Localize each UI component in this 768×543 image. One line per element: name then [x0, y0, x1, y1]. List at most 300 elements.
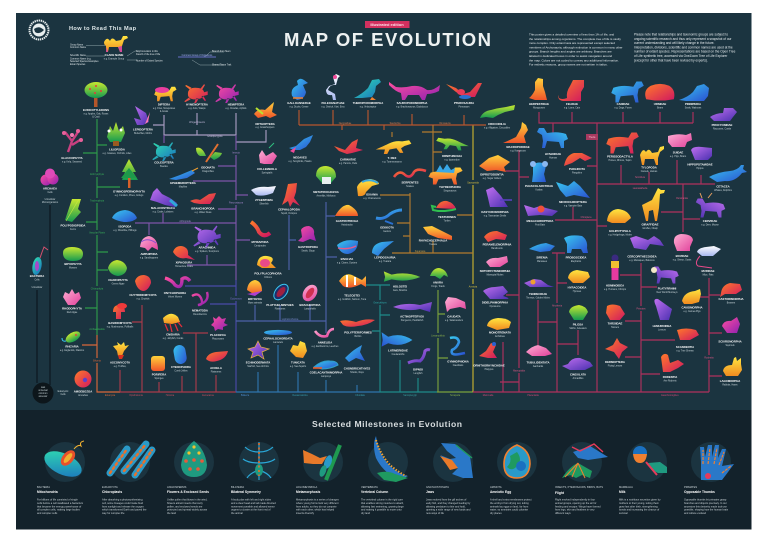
feathered theropod: [353, 79, 383, 108]
branch labels: Neognathae: [339, 122, 352, 125]
fly: DIPTERA: [158, 102, 170, 106]
grasshopper: [254, 102, 277, 129]
koala: PHASCOLARCTIDAE: [525, 184, 553, 188]
spider: [193, 225, 221, 253]
kangaroo: MACROPODIDAE: [506, 145, 530, 149]
milestone: flight: animal groups, opening up the air for: [555, 501, 597, 505]
milestone: milk: mothers to their young, letting them: [619, 501, 659, 505]
orange shell: GASTROTRICHA: [336, 219, 358, 223]
archaea: Microorganisms: [42, 201, 59, 204]
branch labels: Vascular Plants: [89, 232, 106, 234]
euglena: [60, 329, 85, 352]
nematode worm pair: ONYCHOPHORA: [164, 291, 186, 295]
tarsier: [606, 304, 625, 329]
armadillo: CINGULATA: [570, 372, 586, 376]
sauropod: SAUROPODOMORPHA: [397, 101, 427, 105]
whale: Whales, Dolphins: [714, 190, 733, 192]
hummingbird: [289, 135, 313, 163]
hedgehog: e.g. Hedgehogs, Moles: [608, 234, 633, 236]
milestone: amniotic egg: AMNIOTA: [490, 485, 502, 489]
horseshoe crab: Horseshoe Crabs: [175, 265, 194, 268]
tree branches: protists base: [82, 335, 120, 392]
milestone: chloroplasts: [102, 442, 152, 515]
legend: how to read this map: CLADE NAME: [105, 53, 123, 57]
opossum: Opossums: [490, 306, 501, 308]
legend: how to read this map: How to Read This Map: [69, 26, 137, 32]
giraffe: Giraffes, Okapi: [642, 227, 658, 230]
fruit bat: [524, 205, 558, 226]
bacteria: [30, 247, 48, 289]
clownfish: TELEOSTEI: [344, 294, 360, 298]
blue clam: [337, 240, 358, 264]
branch labels: Afrotheria: [552, 304, 563, 308]
legend: how to read this map: Scientific Name: [70, 54, 87, 57]
frog: ANURA: [433, 280, 443, 284]
sponge: [151, 356, 166, 380]
nematode worm pair: Velvet Worms: [168, 296, 183, 298]
header: logo: [30, 20, 48, 40]
pink frilly alga: [62, 289, 82, 314]
brachiopod: [299, 282, 321, 310]
lungfish eel: Lungfish: [414, 373, 423, 375]
human: [604, 254, 627, 291]
deer: CERVIDAE: [703, 219, 717, 223]
milestone: mitochondria: BACTERIA: [37, 485, 50, 489]
seal: PINNIPEDIA: [685, 102, 701, 106]
giraffe: [641, 188, 665, 230]
pterosaur: PTEROSAURIA: [454, 101, 474, 105]
horse: PERISSODACTYLA: [607, 154, 633, 158]
camel: Camels, Llamas: [641, 171, 658, 173]
intro text column 2: number of extant species. Representations are based on the Open Tree: [634, 50, 736, 54]
jellyfish: [163, 314, 184, 340]
fly: [153, 87, 177, 113]
milestone: amniotic egg: [490, 442, 537, 515]
pig: [668, 133, 692, 158]
elephant: [564, 235, 588, 263]
milestone: jaws: GNATHOSTOMATA: [426, 485, 449, 489]
turtle: TESTUDINES: [438, 215, 456, 219]
crocodile: e.g. Alligators, Crocodiles: [484, 126, 511, 130]
milestone: metamorphosis: Metamorphosis: [296, 490, 321, 494]
milestone: bilateral symmetry: organs to cluster at the front end of: [231, 508, 271, 512]
coelacanth: LATIMERIIDAE: [388, 348, 408, 352]
amphipod: [140, 236, 159, 260]
branch labels: Ruminantia: [676, 197, 689, 200]
sea squirt: [290, 341, 307, 368]
squid: CEPHALOPODA: [278, 208, 300, 212]
pangolin: Pangolins: [572, 172, 583, 174]
tree branches: plants: [83, 119, 120, 335]
sheep: e.g. Sheep, Goats: [673, 258, 692, 262]
armadillo yellow: Hyraxes: [573, 290, 582, 293]
intro text column 2: of Life synthetic tree, accessed via OneZoom Tree of Life Explorer: [634, 54, 728, 58]
amoeba cell: AMOEBOZOA: [74, 390, 92, 394]
tamarin: [651, 266, 679, 294]
milestone: jaws: allowing predators to bite and hold,: [426, 504, 466, 508]
bear: Bears: [657, 106, 664, 110]
ostrich: PALEOGNATHAE: [321, 101, 345, 105]
aardvark: Aardvarks: [533, 365, 544, 368]
bat: MICROCHIROPTERA: [559, 200, 587, 204]
whale: CETACEA: [716, 184, 730, 188]
archaea: ARCHAEA: [43, 186, 57, 190]
wolf: CANIDAE: [617, 102, 630, 106]
pink worm: Roundworms: [193, 313, 208, 316]
duck bird: e.g. Ducks, Geese: [290, 106, 309, 108]
milestone: vertebral column: that enables strong muscles to attach,: [361, 501, 404, 505]
milestone: amniotic egg: water, so amniotes could colonise: [490, 508, 529, 512]
earthworm: e.g. Earthworms, Leeches: [312, 345, 339, 348]
milestone: flight: from legs, skin and feathers in very: [555, 508, 595, 512]
snake: Snakes: [406, 186, 415, 188]
coelacanth: [382, 332, 412, 356]
firefly shrimp: EPHEMEROPTERA: [170, 181, 196, 185]
giraffe: GIRAFFIDAE: [641, 222, 659, 226]
beaver: CASTORIMORPHA: [719, 297, 743, 301]
milestone: vertebral column: VERTEBRATA: [361, 485, 378, 489]
fern: POLYPODIOPSIDA: [61, 224, 85, 228]
branch labels: Eumetazoa: [202, 394, 215, 397]
octopus: GASTROPODA: [298, 245, 318, 249]
monkey: [627, 236, 664, 262]
moss: [63, 247, 83, 270]
butterfly: Butterflies, Moths: [134, 132, 153, 135]
milestone: mitochondria: [37, 441, 86, 515]
milestone: amniotic egg: A shell and extra membranes protect: [490, 498, 532, 502]
comb jelly: [171, 344, 191, 372]
flowering tree: EUDICOTYLEDONS: [83, 108, 109, 112]
fruit bat: MEGACHIROPTERA: [527, 219, 553, 223]
legend: how to read this map: Extant Species: [70, 63, 86, 66]
blue lion: [537, 128, 568, 160]
treeshrew: SCANDENTIA: [676, 345, 694, 349]
intro text column 2: [634, 32, 736, 62]
sauropod: [389, 82, 440, 108]
iguana: [372, 241, 396, 263]
monkey: e.g. Macaques, Baboons: [629, 260, 656, 262]
nudibranch: Moss animals: [248, 302, 263, 304]
moss: BRYOPHYTA: [64, 262, 82, 266]
orange shell: [335, 205, 358, 226]
tree branches: reptiles: [380, 125, 473, 253]
branch labels: Chordata: [355, 394, 365, 397]
blue clam: BIVALVIA: [341, 257, 353, 261]
stegosaurus: THYREOPHORA: [439, 185, 461, 189]
tag: [365, 21, 410, 28]
intro text column 1: groups. Branch lengths and angles are arbitrary. Branches are: [529, 50, 612, 54]
branch labels: Placentalia: [527, 394, 539, 397]
lilies: e.g. Grasses, Orchids, Lilies: [103, 152, 132, 155]
intro text column 1: For esthetic reasons, group names are not written in italics.: [529, 63, 608, 67]
scarab: [215, 84, 247, 110]
gar: [384, 271, 420, 292]
pterosaur: Pterosaurs: [458, 106, 470, 108]
sea squirt: TUNICATA: [291, 360, 305, 364]
ant: [184, 84, 208, 110]
milestone: milk: bonds and increasing the chance of: [619, 508, 660, 512]
whale: [709, 165, 747, 192]
brachiopod: BRACHIOPODA: [299, 303, 321, 307]
branch labels: Opisthokonta: [129, 394, 143, 397]
blue lion: Hyenas: [549, 158, 558, 160]
hagfish shark: CHONDRICHTHYES: [344, 366, 370, 370]
swordfish: [393, 302, 432, 322]
rabbit: [720, 357, 742, 386]
placozoa: Placozoans: [212, 338, 225, 340]
sponge: PORIFERA: [152, 372, 166, 376]
milestone: mitochondria: and complex cells: [37, 511, 58, 515]
milestone: opposable thumbs: PRIMATES: [684, 485, 697, 489]
red algae bush: [61, 129, 83, 164]
koala: [525, 161, 553, 192]
last universal common ancestor: common: [39, 393, 48, 395]
arachnid: e.g. Water Fleas: [195, 211, 212, 214]
milestone: chloroplasts: EUKARYOTA: [102, 485, 118, 489]
spider: e.g. Spiders, Scorpions: [195, 250, 220, 253]
legend: how to read this map: Common Group of Organisms: [182, 54, 213, 57]
felidae cat: [558, 80, 584, 110]
scarab: e.g. Cicadas, Aphids: [226, 107, 247, 110]
milestone: amniotic egg: animals lay eggs on land, far from: [490, 504, 528, 508]
branch labels: Sauropsida: [467, 182, 480, 184]
branch labels: Mammalia: [483, 395, 494, 397]
legend: how to read this map: Selected Species Examples: [70, 60, 99, 63]
crocodile: CROCODILIA: [488, 122, 506, 126]
archaea: Cells: [47, 192, 53, 194]
purple winged bird: e.g. Parrots, Owls: [339, 162, 358, 165]
bandicoot: Bandicoots: [491, 247, 504, 250]
bandicoot: PERAMELEMORPHIA: [483, 242, 511, 246]
legend: how to read this map: e.g. Example Group: [104, 58, 125, 60]
echidna: Echidnas: [495, 336, 506, 338]
octopus: Snails, Slugs: [301, 250, 315, 252]
ostrich: [321, 74, 345, 108]
intro text column 1: more complex. Only extant taxa are represented except selected: [529, 41, 615, 45]
meerkat: [529, 78, 549, 110]
milestone: chloroplasts: cell, some lineages could make food: [102, 501, 144, 505]
tree branches: amphibians: [437, 290, 473, 392]
hagfish shark: Sharks, Rays: [350, 371, 365, 374]
branch labels: Amniota: [469, 286, 478, 288]
opossum: [482, 286, 508, 308]
intro text column 2: current understanding and will likely change in the future.: [634, 41, 715, 45]
intro text column 2: Please note that relationships and taxonomic groups are subject to: [634, 32, 728, 36]
beetle: COLEOPTERA: [154, 160, 174, 164]
pink worm: [192, 292, 208, 316]
branch labels: Ecdysozoa: [230, 298, 242, 300]
milestone: jaws: opening a wide range of new foods and: [426, 508, 471, 512]
milestone: flight: feeding and escape. Wings have formed: [555, 504, 601, 508]
branch labels: Theria: [589, 136, 596, 139]
brachiopod: Lampshells: [304, 308, 317, 310]
frog: [430, 268, 448, 288]
peacock worm: [313, 166, 339, 198]
milestone: vertebral column: Vertebral Column: [361, 490, 388, 494]
pika: RODENTIA: [663, 375, 677, 379]
intro text column 1: [529, 32, 623, 67]
mantis: [257, 143, 277, 174]
meerkat: Mongooses: [533, 108, 546, 110]
pika: Ave Rodents: [663, 380, 677, 382]
milestone: opposable thumbs: ancestors this dexterity made tool use: [684, 504, 727, 508]
red fungus: e.g. Chytrids: [137, 298, 150, 300]
milestone: opposable thumbs: possible, shaping how the human brain: [684, 508, 729, 512]
tree branches: deuterostomes: [236, 345, 380, 392]
caecilian: GYMNOPHIONA: [447, 360, 469, 364]
deer: [696, 193, 725, 226]
milestone: bilateral symmetry: the animal: [231, 511, 243, 515]
branch labels: Lissamphibia: [431, 336, 445, 338]
beaver: Beavers: [727, 302, 736, 304]
legend: how to read this map: Number of Extant Species: [136, 60, 164, 62]
bear: URSIDAE: [654, 102, 666, 106]
iguana: e.g. Tuatara: [379, 260, 392, 263]
orange shell: Hairybacks: [341, 224, 354, 226]
coral fungus: e.g. Truffles,: [114, 365, 127, 368]
treeshrew: e.g. Tree Shrews: [676, 350, 695, 352]
colugo: DERMOPTERA: [605, 360, 625, 364]
branch labels: Deuterostomia: [293, 394, 308, 397]
axolotl: CAUDATA: [447, 314, 461, 318]
capybara: [681, 289, 703, 313]
koala: Koalas: [535, 190, 543, 192]
human: e.g. Humans, Chimps: [604, 289, 627, 291]
branch labels: Rodentia: [704, 356, 714, 360]
branch labels: Primates: [636, 308, 646, 310]
milestone: jaws: [426, 442, 473, 515]
tamarin: New World Monkeys: [656, 291, 678, 294]
ant: e.g. Ants, Wasps: [188, 107, 206, 110]
intro text column 1: labeled in dedicated boxes in order to assist navigation around: [529, 54, 612, 58]
branch labels: Endopterygota: [208, 135, 223, 138]
hippo: [687, 147, 713, 170]
squid: Squid, Octopus: [281, 212, 298, 215]
squirrel: SCIUROMORPHA: [718, 340, 742, 344]
duck bird: [287, 79, 311, 108]
archaea: [40, 168, 59, 204]
milestone: flowers and seeds: ANGIOSPERMS: [167, 485, 187, 489]
firefly shrimp: Mayflies: [179, 186, 188, 188]
pika: [661, 354, 684, 382]
golden mole: TENRECIDAE: [529, 292, 547, 296]
green dinosaur: [436, 138, 469, 162]
wolf: e.g. Dogs, Foxes: [614, 108, 633, 110]
milestone: amniotic egg: Amniotic Egg: [490, 490, 511, 494]
chiton worm capsule: [266, 282, 294, 310]
peacock worm: Annelids, Molluscs: [316, 194, 336, 198]
tarsier: TARSIIDAE: [608, 322, 623, 326]
milestone: metamorphosis: from adults, so they do not compete: [296, 504, 337, 508]
milestone: chloroplasts: After absorbing a photosynthesising: [102, 498, 143, 502]
milestone: mitochondria: cells before a cell swallowed a bacterium: [37, 501, 83, 505]
firefly shrimp: [169, 168, 198, 188]
milestone: bilateral symmetry: [231, 442, 279, 515]
milestone: opposable thumbs: Opposable Thumbs: [684, 490, 715, 494]
tasmanian devil: [481, 187, 512, 218]
amoeba cell: Amoebas: [78, 394, 89, 397]
branch labels: Bilateria: [241, 394, 250, 397]
squirrel: Squirrels: [725, 344, 735, 347]
pig: e.g. Pigs, Boars: [670, 155, 687, 158]
milestone: metamorphosis: Metamorphosis is a series of changes: [296, 498, 339, 502]
gar: HOLOSTEI: [393, 284, 407, 288]
branch labels: Pancrustacea: [229, 202, 244, 204]
branch labels: Winged Insects: [189, 121, 206, 124]
green algae: Green Algae: [112, 282, 125, 286]
sloth: Sloths, Anteaters: [569, 327, 588, 330]
acoela: ACOELA: [210, 366, 222, 370]
acoela: Flatworms: [211, 370, 222, 374]
rabbit: Rabbits, Hares: [722, 384, 738, 386]
tasmanian quoll: e.g. Sugar Gliders: [483, 177, 502, 180]
lancelet: Lampreys: [321, 375, 332, 378]
felidae cat: e.g. Lions, Cats: [564, 106, 581, 110]
milestone: milk: survival: [619, 511, 628, 515]
milestones heading: Selected Milestones in Evolution: [312, 419, 462, 429]
fern: [61, 199, 85, 231]
milestone: chloroplasts: way for complex life: [102, 511, 125, 515]
arachnid: BRANCHIOPODA: [191, 206, 215, 210]
opossum: DIDELPHIMORPHIA: [482, 300, 508, 304]
milestone: flight: different ways: [555, 511, 571, 515]
kangaroo: e.g. Kangaroos: [510, 150, 527, 152]
hemichordate: Lancelets: [273, 341, 284, 344]
milestone: flowers and seeds: pollen, and enclosed seeds are: [167, 504, 203, 508]
milestone: bilateral symmetry: A body plan with left and right sides: [231, 498, 272, 502]
conifer: [113, 159, 145, 197]
platypus: Platypus: [485, 368, 494, 371]
milestone: flowers and seeds: Flowers & Enclosed Seeds: [167, 490, 209, 494]
pangolin: PHOLIDOTA: [569, 167, 585, 171]
monkey: CERCOPITHECOIDEA: [627, 254, 657, 258]
milestone: metamorphosis: with each other, which has helped: [296, 508, 335, 512]
sheep: [673, 234, 693, 262]
flowering tree: e.g. Apples, Oak, Roses: [84, 112, 109, 116]
milestone: metamorphosis: [296, 442, 343, 515]
tree branches: mammals: [473, 112, 722, 392]
pangolin: [564, 153, 592, 174]
grasshopper: e.g. Grasshoppers: [256, 126, 275, 129]
branch labels: Holozoa: [166, 395, 175, 397]
milestone: flight: Flight: [555, 491, 565, 495]
branch labels: Eukaryota: [105, 394, 116, 397]
branch labels: Sarcopterygii: [403, 394, 417, 397]
tasmanian quoll: [479, 155, 510, 180]
milestone: amniotic egg: the embryo from drying out, letting: [490, 501, 529, 505]
armadillo yellow: [568, 270, 590, 293]
milestone: jaws: Jaws: [426, 490, 434, 494]
milestone: flowers and seeds: the land: [167, 511, 177, 515]
bacteria: Unicellular: [32, 286, 43, 289]
intro text column 2: (except for other that have been revised by experts).: [634, 58, 708, 62]
last universal common ancestor: universal: [38, 389, 48, 392]
milestone: metamorphosis: HOLOMETABOLA: [296, 485, 318, 489]
legend: how to read this map: Common Name: [70, 47, 87, 49]
branch labels: Dinosauria: [440, 122, 451, 125]
red eel: [340, 319, 375, 338]
chiton worm capsule: Flatworms: [275, 308, 286, 310]
tree branches: root lines: [37, 205, 50, 385]
pink frilly alga: RHODOPHYTA: [62, 306, 82, 310]
elephant: PROBOSCIDEA: [566, 256, 586, 260]
tree branches: insects: [153, 113, 266, 142]
milestone: bilateral symmetry: Bilateral Symmetry: [231, 490, 261, 494]
green dinosaur: ORNITHISCHIA: [442, 154, 462, 158]
milestone: milk: [619, 442, 667, 515]
milestone: jaws: early fish, and they changed feeding by: [426, 501, 471, 505]
grasshopper: ORTHOPTERA: [255, 122, 275, 126]
